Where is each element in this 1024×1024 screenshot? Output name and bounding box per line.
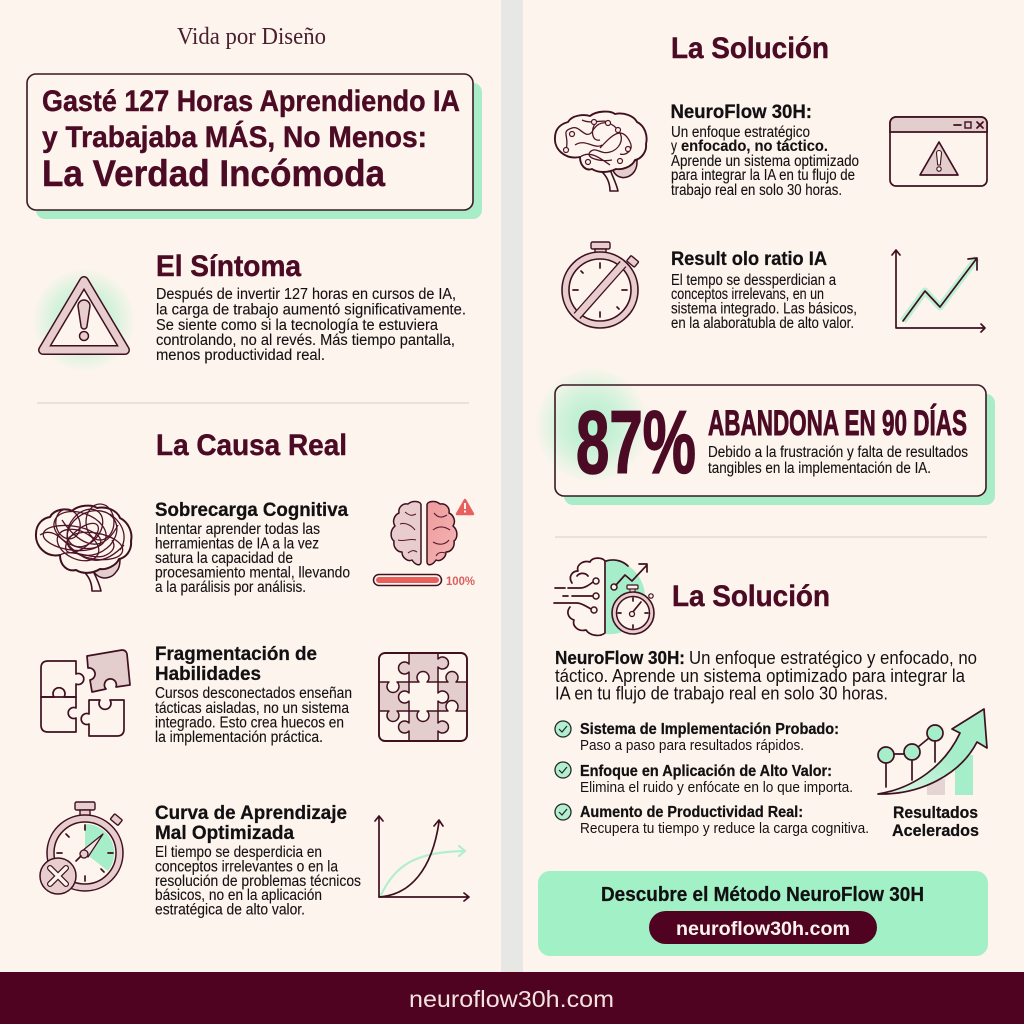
text: sobrecarga cognitiva: herramientas de IA a la vez bbox=[155, 536, 319, 552]
title card bbox=[27, 74, 482, 219]
icon: overloaded brain with 100% bar bbox=[374, 500, 475, 588]
icon: accelerated growth arrow bbox=[878, 709, 987, 795]
text: sobrecarga cognitiva bbox=[155, 500, 350, 596]
text: resultado ratio ia: en la alaboratubla de alto valor. bbox=[671, 315, 854, 332]
panel: right column bbox=[534, 32, 995, 956]
icon: stopwatch crossed out bbox=[562, 242, 639, 328]
text: curva de aprendizaje bbox=[155, 803, 361, 918]
text: curva de aprendizaje: estratégica de alto valor. bbox=[155, 902, 305, 918]
callout: 87% abandona: Debido a la frustración y falta de resultados bbox=[708, 444, 968, 461]
text: fragmentación de habilidades: tácticas aisladas, no un sistema bbox=[155, 700, 349, 717]
title card: La Verdad Incómoda bbox=[42, 153, 385, 194]
title card: y Trabajaba MÁS, No Menos: bbox=[42, 120, 427, 154]
heading: la causa real: La Causa Real bbox=[156, 429, 347, 462]
section: el síntoma: Se siente como si la tecnología te estuviera bbox=[156, 317, 438, 334]
icon: scattered puzzle pieces bbox=[41, 650, 130, 736]
text: neuroflow 30h: enfocado, no táctico. bbox=[681, 138, 828, 155]
text: neuroflow 30h: trabajo real en solo 30 horas. bbox=[671, 182, 842, 199]
list item: aumento de productividad: Aumento de Productividad Real: bbox=[580, 804, 803, 821]
text: curva de aprendizaje: El tiempo se desperdicia en bbox=[155, 844, 322, 861]
heading: la solución: La Solución bbox=[671, 32, 829, 65]
list item: enfoque en aplicación: Enfoque en Aplicación de Alto Valor: bbox=[580, 763, 832, 780]
section: el síntoma: El Síntoma bbox=[156, 250, 301, 283]
panel: left column bbox=[27, 24, 482, 918]
text: solution summary bbox=[555, 648, 977, 704]
icon: brain with stopwatch bbox=[554, 558, 654, 635]
section: el síntoma: controlando, no al revés. Más tiempo pantalla, bbox=[156, 332, 455, 349]
text: neuroflow 30h: Aprende un sistema optimizado bbox=[671, 153, 859, 170]
text: resultado ratio ia bbox=[671, 248, 857, 332]
text: fragmentación de habilidades: integrado. Esto crea huecos en bbox=[155, 714, 344, 732]
text: fragmentación de habilidades: la implementación práctica. bbox=[155, 729, 323, 746]
call to action panel bbox=[538, 871, 988, 956]
text: resultado ratio ia: Result olo ratio IA bbox=[671, 248, 827, 270]
footer bar bbox=[0, 972, 1024, 1024]
text: resultado ratio ia: sistema integrado. Las básicos, bbox=[671, 300, 857, 318]
text: curva de aprendizaje: resolución de problemas técnicos bbox=[155, 873, 361, 890]
text: fragmentación de habilidades: Cursos desconectados enseñan bbox=[155, 685, 352, 702]
text: curva de aprendizaje: conceptos irrelevantes o en la bbox=[155, 858, 338, 876]
section: el síntoma bbox=[156, 250, 466, 364]
icon: browser window warning bbox=[890, 117, 987, 186]
label: resultados acelerados: Acelerados bbox=[892, 822, 979, 840]
label: resultados acelerados bbox=[892, 804, 979, 840]
chart: rising line bbox=[892, 250, 985, 332]
text: curva de aprendizaje: Mal Optimizada bbox=[155, 823, 294, 844]
call to action panel: Descubre el Método NeuroFlow 30H bbox=[601, 884, 924, 906]
list item: sistema de implementación: Paso a paso para resultados rápidos. bbox=[580, 738, 804, 754]
list item: enfoque en aplicación: Elimina el ruido y enfócate en lo que importa. bbox=[580, 780, 853, 796]
list item: aumento de productividad bbox=[555, 804, 869, 837]
call to action panel: neuroflow30h.com bbox=[676, 918, 850, 940]
text: neuroflow 30h: para integrar la IA en tu flujo de bbox=[671, 167, 855, 184]
icon: overloaded brain with 100% bar: 100% bbox=[446, 576, 475, 588]
list item: aumento de productividad: Recupera tu tiempo y reduce la carga cognitiva. bbox=[580, 821, 869, 837]
callout: 87% abandona: tangibles en la implementación de IA. bbox=[708, 460, 931, 477]
heading: la solución 2: La Solución bbox=[672, 580, 830, 613]
icon: stopwatch with x badge bbox=[40, 802, 123, 894]
text: neuroflow 30h: Un enfoque estratégico bbox=[671, 124, 810, 141]
text: solution summary: NeuroFlow 30H: bbox=[555, 648, 685, 668]
section: el síntoma: Después de invertir 127 horas en cursos de IA, bbox=[156, 286, 456, 303]
list item: sistema de implementación: Sistema de Implementación Probado: bbox=[580, 721, 839, 738]
chart: learning curves bbox=[375, 816, 469, 901]
callout: 87% abandona: 87% bbox=[576, 392, 696, 492]
text: curva de aprendizaje: básicos, no en la aplicación bbox=[155, 887, 322, 904]
footer bar: neuroflow30h.com bbox=[409, 986, 614, 1012]
text: sobrecarga cognitiva: a la parálisis por análisis. bbox=[155, 579, 306, 596]
text: resultado ratio ia: conceptos irrelevans, en un bbox=[671, 286, 824, 303]
icon: puzzle grid bbox=[379, 653, 467, 741]
text: neuroflow 30h: y bbox=[671, 138, 677, 155]
text: fragmentación de habilidades: Fragmentación de bbox=[155, 644, 317, 665]
callout: 87% abandona bbox=[534, 367, 995, 505]
text: neuroflow 30h bbox=[670, 101, 859, 199]
icon: tangled brain bbox=[36, 502, 131, 591]
text: sobrecarga cognitiva: Intentar aprender todas las bbox=[155, 521, 320, 538]
text: solution summary: Un enfoque estratégico y enfocado, no bbox=[689, 648, 977, 668]
label: resultados acelerados: Resultados bbox=[893, 804, 978, 822]
text: sobrecarga cognitiva: procesamiento mental, llevando bbox=[155, 564, 350, 582]
text: solution summary: táctico. Aprende un sistema optimizado para integrar la bbox=[555, 666, 966, 686]
icon: connected brain bbox=[555, 112, 647, 191]
text: fragmentación de habilidades bbox=[155, 644, 352, 746]
list item: enfoque en aplicación bbox=[555, 762, 853, 796]
icon: warning triangle bbox=[32, 268, 136, 372]
section: el síntoma: la carga de trabajo aumentó significativamente. bbox=[156, 302, 466, 318]
brand name: Vida por Diseño bbox=[177, 24, 326, 50]
text: sobrecarga cognitiva: Sobrecarga Cognitiva bbox=[155, 500, 348, 521]
text: curva de aprendizaje: Curva de Aprendizaje bbox=[155, 803, 347, 824]
text: sobrecarga cognitiva: satura la capacidad de bbox=[155, 550, 293, 567]
list item: sistema de implementación bbox=[555, 721, 839, 754]
section: el síntoma: menos productividad real. bbox=[156, 347, 325, 364]
text: solution summary: IA en tu flujo de trabajo real en solo 30 horas. bbox=[555, 684, 888, 704]
text: neuroflow 30h: NeuroFlow 30H: bbox=[670, 101, 812, 123]
text: resultado ratio ia: El tempo se dessperdician a bbox=[671, 272, 836, 289]
title card: Gasté 127 Horas Aprendiendo IA bbox=[42, 85, 460, 118]
text: fragmentación de habilidades: Habilidades bbox=[155, 664, 261, 685]
